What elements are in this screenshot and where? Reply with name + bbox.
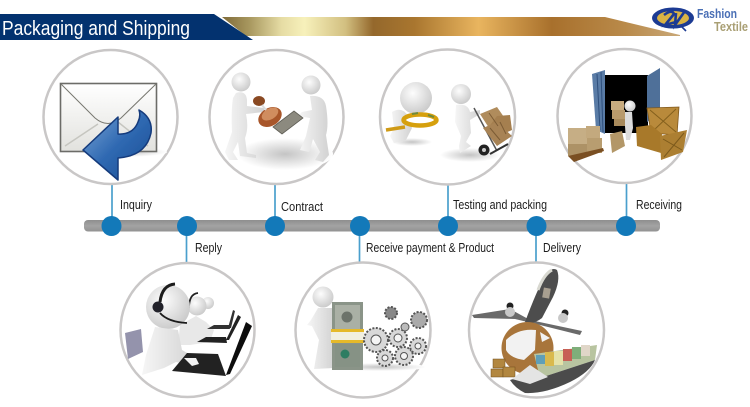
icon: container ship: [510, 345, 597, 393]
logo: [652, 6, 748, 34]
figure: right person: [298, 76, 329, 162]
icon: envelope: [60, 84, 167, 157]
connector lines: [112, 183, 626, 263]
icon: money stack: [331, 302, 364, 370]
figure: left person: [225, 72, 264, 160]
floor shadow: [237, 138, 333, 170]
step labels: Receiving: [636, 198, 682, 212]
icon: reply arrow: [83, 110, 151, 180]
logo emblem: [652, 8, 694, 31]
timeline nodes: [102, 216, 636, 236]
floor shadow: [440, 148, 500, 162]
icon: container: [592, 68, 660, 134]
timeline bar: [84, 220, 660, 232]
icon: pallet boxes: [568, 126, 604, 162]
logo wordmark: Fashion: [697, 6, 737, 21]
icon: document: [273, 111, 303, 134]
title: Packaging and Shipping: [2, 18, 190, 40]
circle: delivery: [469, 262, 604, 398]
step labels: Delivery: [543, 241, 582, 255]
icon: cartons: [491, 359, 515, 377]
figure: worker with boxes: [610, 100, 636, 153]
figures: operators row: [178, 293, 214, 345]
icon: globe: [502, 322, 554, 374]
step labels: Inquiry: [120, 198, 153, 212]
icon: airplane: [472, 269, 582, 335]
circle: reply: [120, 263, 254, 397]
step labels: Contract: [281, 200, 323, 214]
circle: contract: [210, 50, 344, 184]
circle: inquiry: [44, 50, 178, 184]
figure: person: [307, 286, 334, 369]
logo wordmark: [697, 6, 748, 34]
circle: receiving: [558, 49, 692, 183]
step labels: Reply: [195, 241, 223, 255]
icon: wooden crates: [636, 107, 687, 160]
header banner: [0, 14, 680, 40]
step labels: [120, 198, 682, 255]
icon: gears: [364, 307, 427, 366]
circle: payment and product: [296, 262, 430, 398]
icon: hand truck with boxes: [474, 107, 512, 156]
gold ribbon: [222, 17, 680, 36]
step labels: Receive payment & Product: [366, 241, 494, 255]
floor shadow: [334, 363, 426, 371]
icon: folder: [125, 329, 143, 359]
navy title tab: [0, 14, 253, 40]
figure: front operator: [142, 284, 196, 375]
step labels: Testing and packing: [453, 198, 547, 212]
circle: testing and packing: [380, 50, 515, 184]
icon: laptops: [172, 310, 252, 376]
icon: wax stamp: [253, 96, 285, 131]
figure: mover: [451, 84, 480, 153]
figure: inspector: [390, 82, 432, 143]
icon: gold ring: [386, 113, 436, 130]
